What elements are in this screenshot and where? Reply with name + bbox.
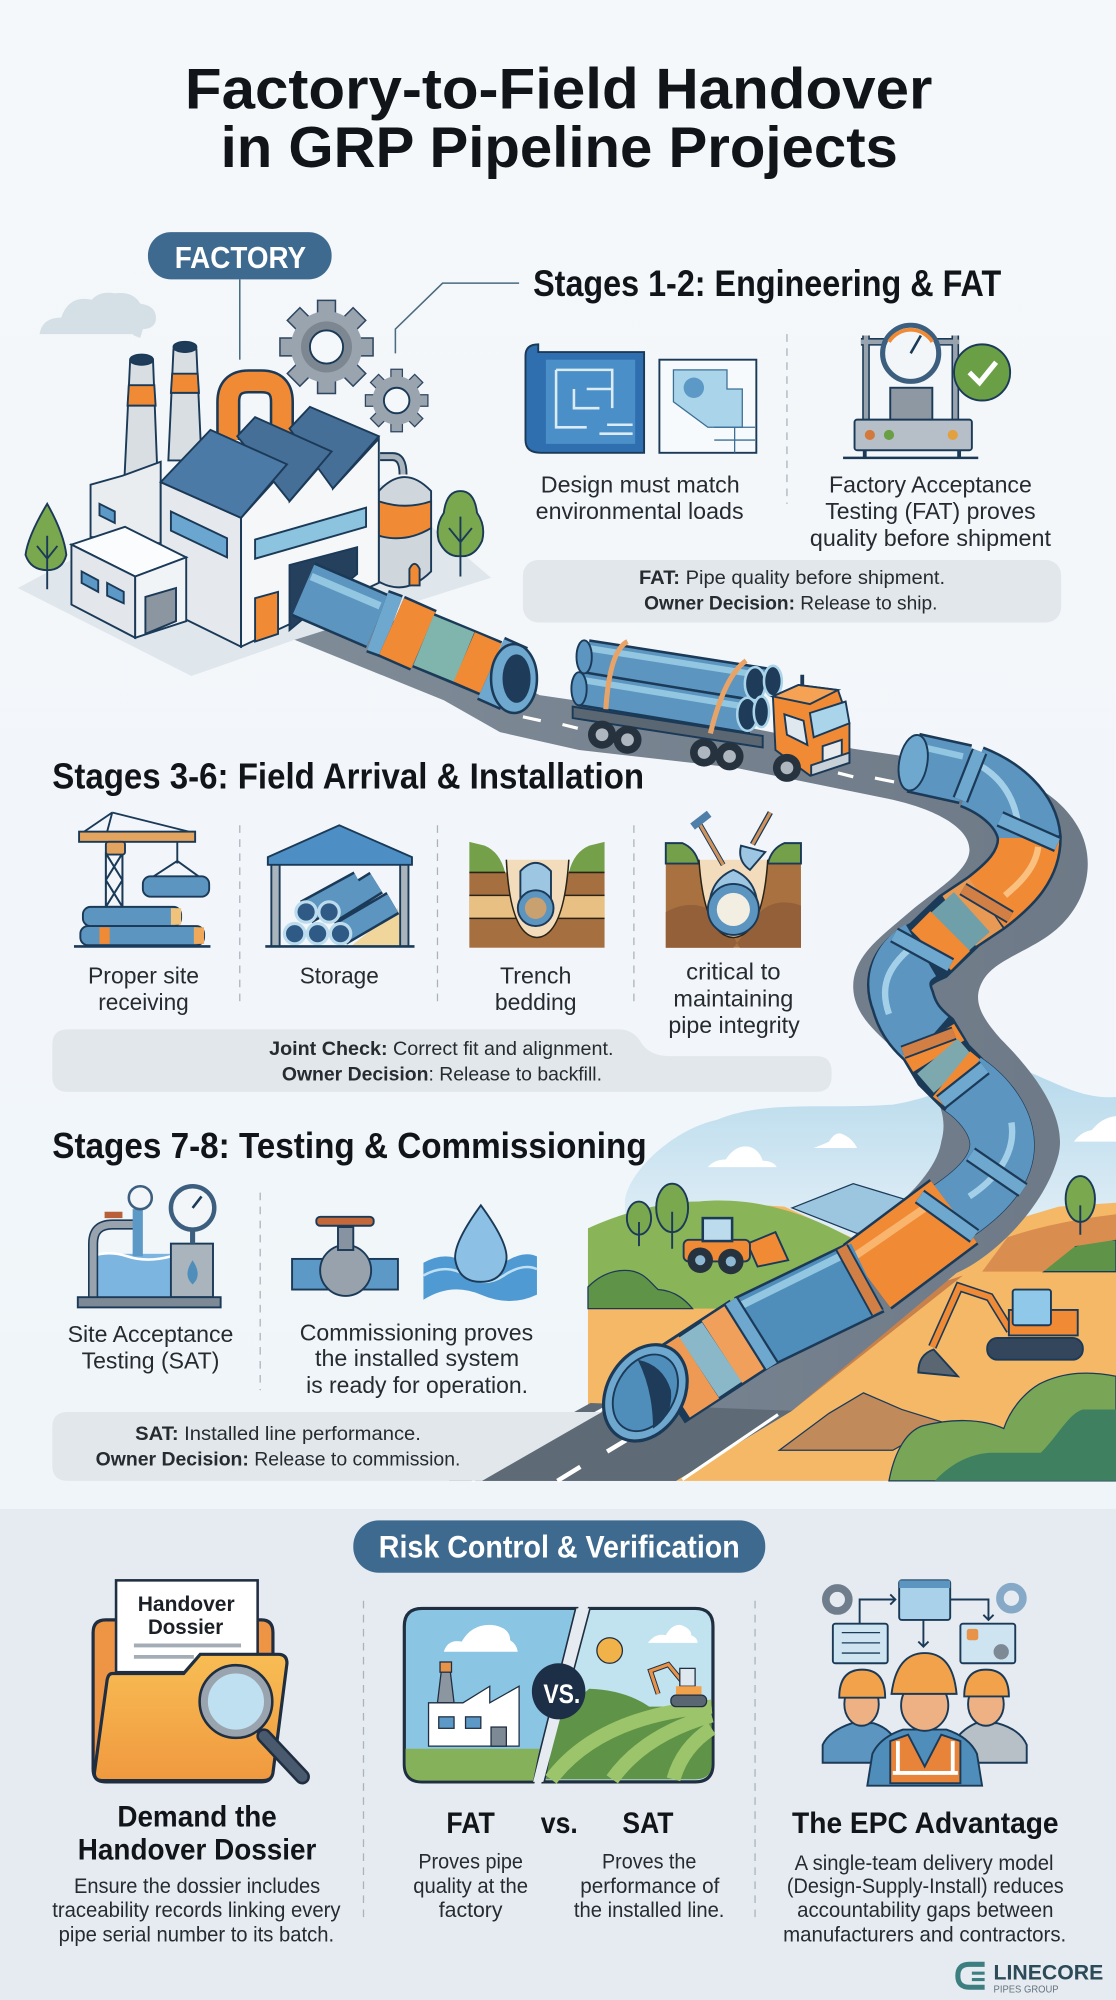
rear block: [91, 462, 161, 543]
text: FAT: Testing (FAT) proves: [825, 498, 1036, 524]
callout: SAT decision: SAT: Installed line performance.: [135, 1423, 421, 1445]
callout: joint check: [52, 1029, 832, 1092]
callout: FAT decision: Owner Decision: Release to ship.: [644, 593, 937, 615]
heading: Stages 1-2: Engineering & FAT: [533, 263, 1002, 304]
column: EPC text: The EPC Advantage: [792, 1807, 1059, 1840]
label: critical: maintaining: [673, 985, 793, 1011]
panel: stages 3-6: [52, 756, 832, 1092]
icon: valve: [292, 1217, 398, 1296]
chimneys: [124, 342, 202, 494]
pipe opening: [491, 644, 537, 713]
column: EPC text: [783, 1807, 1066, 1946]
connector line: [395, 283, 519, 353]
column: FAT vs SAT text: factory: [439, 1897, 503, 1922]
blue elbow: [972, 777, 1029, 838]
glass section: [959, 903, 986, 921]
gears: [280, 300, 428, 432]
heading: Stages 3-6: Field Arrival & Installation: [52, 756, 644, 796]
callout: joint check: Owner Decision: Release to backfill.: [282, 1063, 602, 1085]
cab: [773, 685, 849, 776]
short factory pipe: [304, 577, 514, 679]
lower road: [449, 1403, 792, 1481]
callout: SAT decision: [52, 1412, 602, 1481]
icon: storage shelter: [265, 825, 415, 946]
heading pill: [353, 1520, 765, 1573]
tree left: [26, 504, 66, 589]
pipe open end bottom: [587, 1330, 704, 1456]
label: SAT: Site Acceptance: [68, 1321, 233, 1347]
heading: Stages 7-8: Testing & Commissioning: [52, 1126, 647, 1166]
column: EPC text: (Design-Supply-Install) reduces: [787, 1873, 1064, 1898]
column: EPC text: accountability gaps between: [797, 1897, 1054, 1922]
column: dossier text: Ensure the dossier includes: [74, 1873, 320, 1898]
column: dossier text: pipe serial number to its batch.: [59, 1921, 334, 1946]
small building: [71, 527, 186, 577]
icon: handover dossier folder: [93, 1580, 302, 1782]
green hill: [889, 1373, 1116, 1481]
road: [290, 599, 1088, 1481]
label: commissioning: the installed system: [315, 1345, 519, 1371]
orange pipe: [228, 381, 282, 440]
column: dossier text: [52, 1801, 341, 1946]
blue section 3: [946, 1084, 1002, 1216]
truck with pipes: [571, 640, 849, 782]
big orange section: [867, 1212, 954, 1277]
icon: EPC team: [823, 1580, 1027, 1786]
icon: plan drawing: [659, 360, 756, 453]
right wall: [241, 439, 379, 647]
label: proper site receiving: Proper site: [88, 962, 199, 988]
text: FAT: Factory Acceptance: [829, 471, 1032, 497]
pipe joints: [731, 751, 1057, 1366]
icon: handover dossier folder: Dossier: [148, 1616, 223, 1639]
bulldozer: [684, 1218, 788, 1274]
panel: stages 7-8: [52, 1126, 647, 1481]
end section: [722, 1333, 751, 1352]
landscape vehicles and trees: [627, 1176, 1095, 1376]
mountain: [792, 1184, 908, 1233]
heading pill: Risk Control & Verification: [379, 1528, 740, 1564]
label: proper site receiving: receiving: [98, 989, 189, 1015]
logo: LINECORE: [994, 1960, 1103, 1985]
label: critical: pipe integrity: [668, 1012, 800, 1038]
logo: [958, 1960, 1103, 1995]
worker centre: [867, 1653, 982, 1786]
text: design: [536, 471, 744, 524]
label: trench bedding: bedding: [495, 989, 576, 1015]
callout: SAT decision: Owner Decision: Release to commission.: [96, 1449, 460, 1471]
silo: [379, 477, 431, 587]
column: dossier text: Handover Dossier: [78, 1834, 317, 1867]
roofs: [290, 407, 379, 489]
orange section: [986, 838, 1029, 903]
icon: FAT vs SAT scene: VS.: [543, 1679, 580, 1709]
column: FAT vs SAT text: vs.: [541, 1807, 578, 1840]
column: EPC text: A single-team delivery model: [795, 1850, 1054, 1875]
column: FAT vs SAT text: Proves the: [602, 1849, 696, 1874]
label: storage: Storage: [300, 962, 379, 988]
column: FAT vs SAT text: quality at the: [413, 1873, 528, 1898]
column: FAT vs SAT text: Proves pipe: [418, 1849, 523, 1874]
mound: [779, 1393, 943, 1450]
column: FAT vs SAT text: performance of: [580, 1873, 720, 1898]
cap: [913, 763, 965, 774]
label: commissioning: [300, 1320, 533, 1398]
cloud: [40, 293, 156, 338]
column: FAT vs SAT text: SAT: [622, 1807, 673, 1840]
factory illustration: [18, 293, 491, 676]
title: Factory-to-Field Handover: [185, 57, 932, 121]
label: proper site receiving: [88, 962, 199, 1015]
factory label: [148, 232, 332, 360]
label: critical: critical to: [686, 959, 781, 985]
label: commissioning: is ready for operation.: [306, 1372, 528, 1398]
factory label: FACTORY: [175, 241, 306, 275]
ground: [18, 485, 491, 676]
column: EPC text: manufacturers and contractors.: [783, 1921, 1066, 1946]
label: trench bedding: Trench: [500, 962, 571, 988]
icon: handover dossier folder: Handover: [138, 1593, 235, 1616]
callout: joint check: Joint Check: Correct fit and alignment.: [269, 1038, 613, 1060]
text: design: Design must match: [541, 471, 740, 497]
callout: FAT decision: [523, 560, 1061, 622]
icon: FAT vs SAT scene: [404, 1608, 713, 1782]
label: critical: [668, 959, 800, 1038]
title: in GRP Pipeline Projects: [221, 116, 898, 180]
icon: water drop: [423, 1205, 537, 1301]
column: FAT vs SAT text: FAT: [446, 1807, 495, 1840]
tree right: [438, 491, 483, 577]
label: SAT: [68, 1321, 233, 1374]
trees: [627, 1176, 1095, 1235]
worker left: [823, 1670, 897, 1763]
icon: blueprint: [525, 344, 644, 453]
excavator: [918, 1287, 1083, 1376]
orange section 2: [929, 1040, 939, 1056]
worker right: [953, 1670, 1027, 1763]
pipe outline: [663, 763, 1029, 1390]
door opening: [290, 547, 357, 630]
column: dossier text: traceability records linking every: [52, 1897, 341, 1922]
text: design: environmental loads: [536, 498, 744, 524]
main winding pipe: [663, 746, 1038, 1390]
title: [185, 57, 932, 180]
wheels: [588, 721, 801, 782]
text: FAT: quality before shipment: [810, 525, 1052, 551]
label: commissioning: Commissioning proves: [300, 1320, 533, 1346]
column: FAT vs SAT text: the installed line.: [574, 1897, 724, 1922]
column: dossier text: Demand the: [117, 1801, 277, 1834]
windows: [171, 511, 227, 557]
logo: PIPES GROUP: [994, 1984, 1059, 1995]
icon: pressure gauge test rig: [843, 325, 1010, 458]
column: FAT vs SAT text: [413, 1807, 724, 1922]
text: FAT: [810, 471, 1052, 551]
panel: stages 1-2: [523, 263, 1061, 622]
callout: FAT decision: FAT: Pipe quality before shipment.: [639, 567, 945, 589]
icon: trench with tools: [666, 812, 801, 948]
landscape backdrop: [588, 1072, 1116, 1481]
blue elbow 2: [899, 950, 929, 1040]
bottom panel: risk control: [0, 1509, 1116, 2000]
label: trench bedding: [495, 962, 576, 1015]
icon: trench bedding: [469, 842, 605, 948]
left wall: [161, 482, 241, 647]
icon: SAT test rig: [78, 1186, 221, 1307]
clouds: [708, 1116, 1116, 1167]
pipe open end top: [895, 733, 932, 793]
big blue section: [751, 1277, 867, 1333]
label: SAT: Testing (SAT): [82, 1348, 219, 1374]
icon: crane: [74, 812, 210, 946]
